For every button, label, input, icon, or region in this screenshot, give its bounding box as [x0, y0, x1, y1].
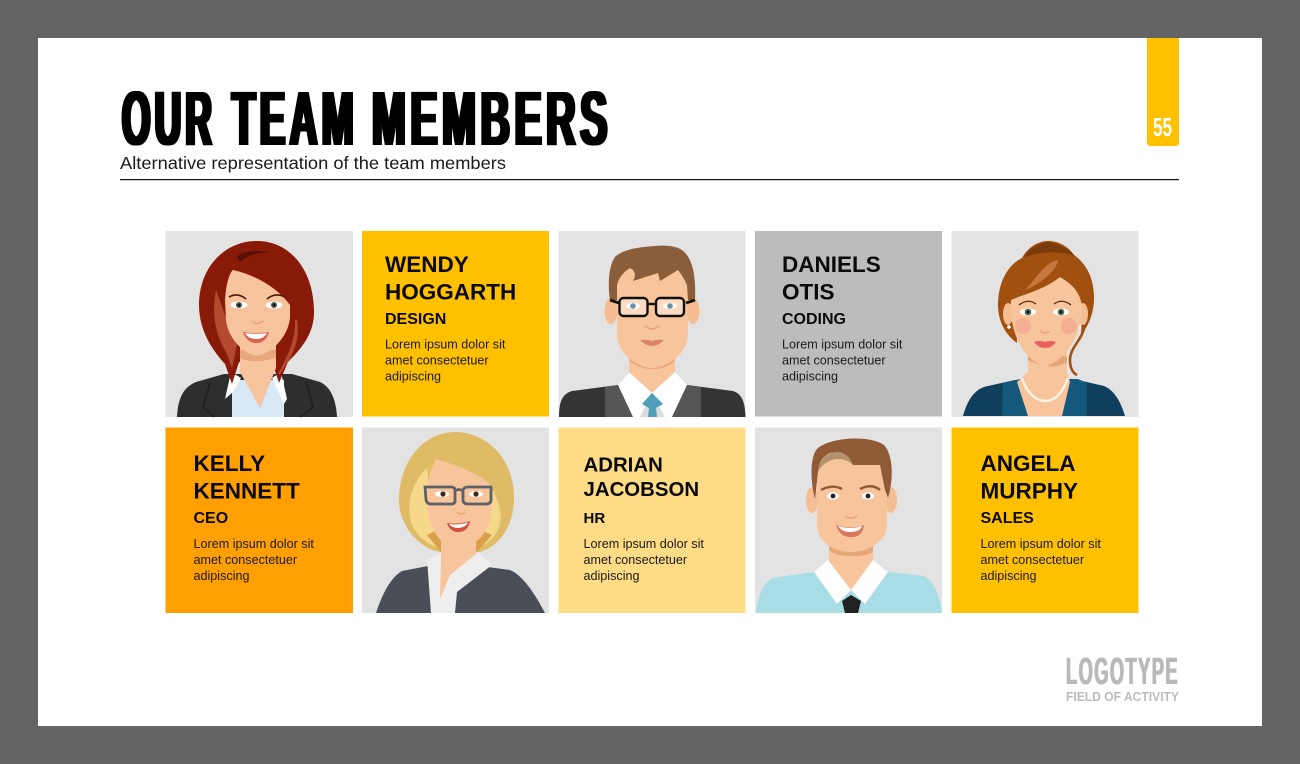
shirt — [232, 380, 284, 417]
page number tab — [1147, 38, 1179, 146]
bio card: Adrian Jacobson: Lorem ipsum dolor sit — [584, 537, 704, 551]
neck — [440, 530, 476, 599]
jacket — [559, 385, 746, 417]
bio card: Kelly Kennett: CEO — [194, 510, 228, 527]
head — [617, 262, 688, 368]
bio card: Wendy Hoggarth: amet consectetuer — [385, 354, 489, 368]
face — [225, 270, 290, 356]
bio card: Daniels Otis: adipiscing — [782, 370, 838, 384]
portrait card: Daniels Otis — [558, 231, 746, 417]
face details — [230, 302, 248, 308]
portrait card: smiling man — [755, 428, 942, 613]
jacket — [177, 374, 337, 417]
page number tab: 55 — [1153, 112, 1172, 142]
logotype: FIELD OF ACTIVITY — [1066, 690, 1180, 704]
bio card: Angela Murphy: SALES — [980, 510, 1034, 527]
bio card: Wendy Hoggarth: Lorem ipsum dolor sit — [385, 338, 506, 352]
bio card: Adrian Jacobson: HR — [584, 510, 605, 527]
bio card: Adrian Jacobson: JACOBSON — [584, 479, 699, 501]
portrait card: brown-haired woman — [952, 231, 1138, 417]
portrait card: Wendy Hoggarth — [166, 231, 353, 417]
hair — [812, 439, 892, 499]
bio card: Daniels Otis: DANIELS — [782, 252, 881, 277]
bio card: Kelly Kennett: KELLY — [194, 451, 265, 476]
bio card: Adrian Jacobson: amet consectetuer — [584, 553, 687, 567]
necklace — [1022, 378, 1068, 401]
glasses — [425, 487, 491, 504]
collar — [814, 560, 888, 604]
bio card: Angela Murphy — [952, 428, 1138, 613]
nose and mouth — [645, 326, 659, 329]
face — [427, 459, 492, 546]
jacket — [376, 566, 545, 613]
bio card: Daniels Otis: amet consectetuer — [782, 354, 886, 368]
face details — [821, 486, 880, 490]
tie — [642, 393, 663, 417]
shirt — [630, 395, 676, 417]
bio card: Kelly Kennett: KENNETT — [194, 478, 300, 504]
title: TEAM — [232, 76, 358, 162]
hair curl — [1070, 322, 1085, 375]
subtitle: Alternative representation of the team members — [120, 153, 506, 173]
bio card: Angela Murphy: MURPHY — [980, 478, 1078, 504]
bio card: Wendy Hoggarth: DESIGN — [385, 311, 446, 328]
bio card: Adrian Jacobson — [558, 428, 746, 613]
bio card: Wendy Hoggarth: WENDY — [385, 252, 469, 277]
portrait card: blonde woman with glasses — [362, 428, 549, 613]
bio card: Angela Murphy: ANGELA — [980, 451, 1076, 476]
hair — [199, 241, 314, 384]
hair — [609, 246, 695, 300]
title — [122, 76, 612, 162]
neck — [240, 340, 276, 408]
face details — [435, 491, 449, 497]
glasses — [610, 300, 695, 303]
ears — [806, 487, 818, 513]
bio card: Wendy Hoggarth — [362, 231, 549, 416]
bio card: Daniels Otis: Lorem ipsum dolor sit — [782, 338, 903, 352]
bio card: Daniels Otis — [755, 231, 942, 416]
title: MEMBERS — [372, 76, 612, 162]
bio card: Kelly Kennett — [166, 428, 353, 613]
skin — [1017, 350, 1070, 416]
title: OUR — [122, 76, 216, 162]
neck — [829, 535, 873, 590]
bio card: Wendy Hoggarth: HOGGARTH — [385, 280, 516, 304]
ears — [604, 298, 618, 324]
neck — [629, 350, 675, 393]
hair — [998, 241, 1094, 343]
bio card: Daniels Otis: OTIS — [782, 280, 835, 304]
bio card: Adrian Jacobson: adipiscing — [584, 569, 640, 583]
ears — [1003, 303, 1013, 325]
bio card: Angela Murphy: adipiscing — [980, 569, 1037, 583]
text: LOGOTYPE — [1066, 651, 1179, 693]
bio card: Adrian Jacobson: ADRIAN — [584, 454, 663, 476]
logotype — [1066, 651, 1180, 704]
bio card: Kelly Kennett: adipiscing — [194, 569, 250, 583]
blouse — [963, 380, 1125, 416]
bio card: Daniels Otis: CODING — [782, 311, 846, 328]
shirt — [756, 572, 942, 613]
shirt — [427, 552, 492, 613]
bio card: Wendy Hoggarth: adipiscing — [385, 370, 441, 384]
face details — [1015, 318, 1031, 334]
head — [817, 450, 887, 552]
bio card: Kelly Kennett: amet consectetuer — [194, 553, 297, 567]
hair — [399, 432, 514, 552]
face — [1011, 277, 1082, 365]
header rule — [120, 179, 1179, 180]
bio card: Angela Murphy: Lorem ipsum dolor sit — [980, 537, 1101, 551]
bio card: Kelly Kennett: Lorem ipsum dolor sit — [194, 537, 314, 551]
bio card: Angela Murphy: amet consectetuer — [980, 553, 1084, 567]
tie — [842, 595, 861, 613]
